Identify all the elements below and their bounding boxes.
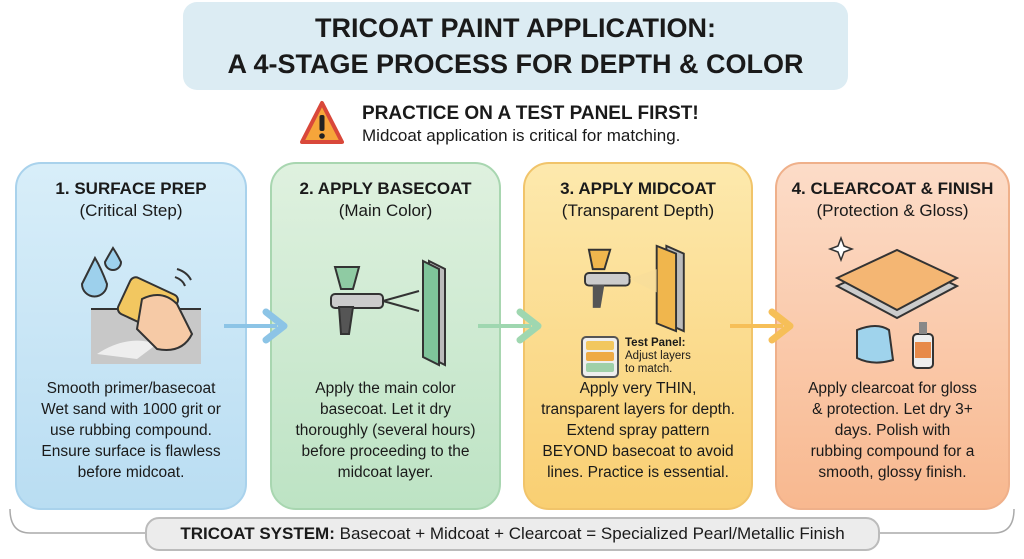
panel: 3 midcoat <box>523 162 753 510</box>
text 2: midcoat layer. <box>338 464 433 481</box>
text 1: before midcoat. <box>78 464 184 481</box>
summary pill: TRICOAT SYSTEM: Basecoat + Midcoat + Clearcoat = Specialized Pearl/Metallic Finish <box>180 524 845 543</box>
text 3: Apply very THIN, <box>580 380 696 397</box>
test panel callout: to match. <box>625 363 672 375</box>
icon: spray gun and gold panel <box>584 244 685 333</box>
icon: glossy layers, cloth, bottle <box>828 236 960 369</box>
text 4: & protection. Let dry 3+ <box>812 401 973 418</box>
heading 3 <box>560 179 716 220</box>
heading 4: (Protection & Gloss) <box>816 201 969 220</box>
text 2: thoroughly (several hours) <box>295 422 476 439</box>
panel: 1 surface prep <box>15 162 247 510</box>
test panel callout: Adjust layers <box>625 350 691 362</box>
text 1: Ensure surface is flawless <box>41 443 221 460</box>
text 2 <box>295 380 476 481</box>
warning text: Midcoat application is critical for matching. <box>362 126 680 145</box>
icon: spray gun and green panel <box>330 259 446 367</box>
warning text: PRACTICE ON A TEST PANEL FIRST! <box>362 103 699 124</box>
text 4 <box>808 380 977 481</box>
text 4: days. Polish with <box>835 422 950 439</box>
bottom bracket <box>9 509 1015 534</box>
warning text <box>362 103 699 145</box>
arrow 3-4 <box>730 308 794 344</box>
summary pill <box>145 517 880 551</box>
text 4: smooth, glossy finish. <box>818 464 967 481</box>
icon: sanding hand <box>81 246 201 364</box>
title box <box>183 2 848 90</box>
title box: A 4-STAGE PROCESS FOR DEPTH & COLOR <box>227 49 804 79</box>
text 2: Apply the main color <box>315 380 456 397</box>
text 3: Extend spray pattern <box>566 422 710 439</box>
text 3: lines. Practice is essential. <box>547 464 729 481</box>
heading 2 <box>300 179 472 220</box>
panel: 4 clearcoat <box>775 162 1010 510</box>
text 1: use rubbing compound. <box>50 422 212 439</box>
heading 3: 3. APPLY MIDCOAT <box>560 179 716 198</box>
arrow 1-2 <box>224 308 288 344</box>
text 4: rubbing compound for a <box>811 443 974 460</box>
panel: 2 basecoat <box>270 162 501 510</box>
title box: TRICOAT PAINT APPLICATION: <box>315 13 716 43</box>
text 1: Wet sand with 1000 grit or <box>41 401 221 418</box>
heading 1 <box>55 179 207 220</box>
text 4: Apply clearcoat for gloss <box>808 380 977 397</box>
icon: warning triangle <box>300 100 344 144</box>
text 3: transparent layers for depth. <box>541 401 735 418</box>
heading 4 <box>792 179 993 220</box>
text 2: basecoat. Let it dry <box>320 401 451 418</box>
heading 2: (Main Color) <box>339 201 432 220</box>
text 1 <box>41 380 221 481</box>
heading 3: (Transparent Depth) <box>562 201 714 220</box>
text 3: BEYOND basecoat to avoid <box>542 443 734 460</box>
text 3 <box>541 380 735 481</box>
text 2: before proceeding to the <box>301 443 470 460</box>
heading 1: 1. SURFACE PREP <box>55 179 207 198</box>
test panel callout: Test Panel: <box>625 337 686 349</box>
test panel callout <box>581 336 691 378</box>
heading 2: 2. APPLY BASECOAT <box>300 179 471 198</box>
text 1: Smooth primer/basecoat <box>47 380 215 397</box>
heading 1: (Critical Step) <box>80 201 182 220</box>
heading 4: 4. CLEARCOAT & FINISH <box>792 179 993 198</box>
arrow 2-3 <box>478 308 542 344</box>
